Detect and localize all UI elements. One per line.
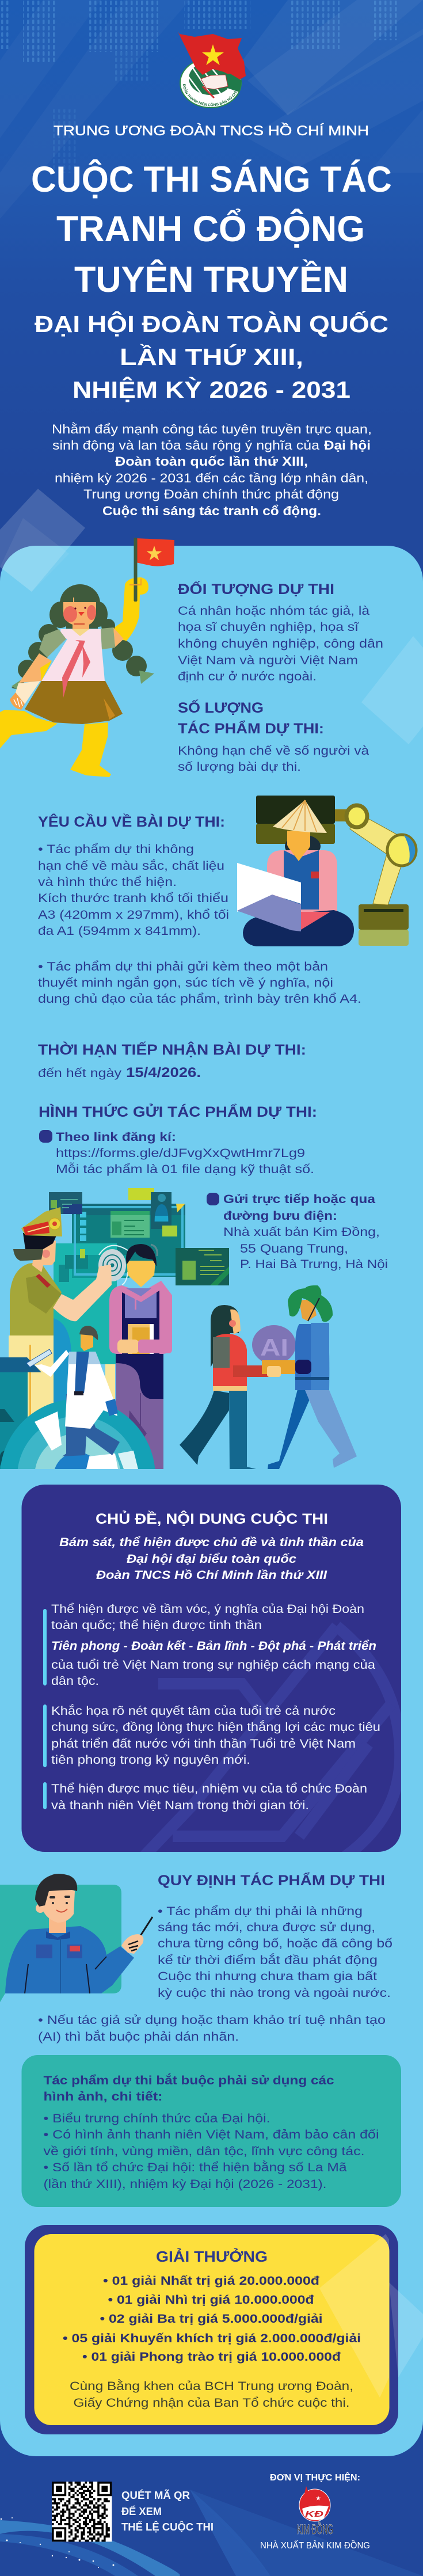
content block 1: toàn quốc; thể hiện được tinh thần: [51, 1619, 262, 1632]
content block 1: Tiên phong - Đoàn kết - Bản lĩnh - Đột phá - Phát triển: [51, 1639, 376, 1653]
section: work regulations: • Tác phẩm dự thi phải là những: [158, 1905, 363, 1918]
flag: [136, 538, 174, 566]
section: contestants: ĐỐI TƯỢNG DỰ THI: [178, 580, 334, 598]
section: work regulations: (AI) thì bắt buộc phải dán nhãn.: [38, 2030, 239, 2044]
fingerprint: [98, 1249, 126, 1281]
intro paragraph: Đại hội: [324, 438, 371, 452]
decorative diamonds: [0, 489, 423, 744]
section: entry requirements: [38, 813, 361, 1006]
theme statement: Bám sát, thể hiện được chủ đề và tinh thần của: [59, 1536, 364, 1549]
prize list: • 01 giải Nhì trị giá 10.000.000đ: [108, 2293, 314, 2307]
braids and hair: [12, 584, 147, 691]
neck scarf: [62, 640, 85, 698]
content block 3: và thanh niên Việt Nam trong thời gian tới.: [51, 1799, 309, 1812]
content block 2: tiên phong trong kỷ nguyên mới.: [51, 1753, 250, 1767]
subtitle: LẦN THỨ XIII,: [120, 344, 303, 370]
section: deadline: [38, 1041, 306, 1080]
section: entry requirements: dung chủ đạo của tác phẩm, trình bày trên khổ A4.: [38, 992, 361, 1006]
section: number of works: TÁC PHẨM DỰ THI:: [178, 720, 324, 737]
woman in red: [180, 1390, 229, 1465]
panel: mandatory imagery: • Biểu trưng chính thức của Đại hội.: [44, 2112, 270, 2125]
prize list: • 05 giải Khuyến khích trị giá 2.000.000đ/giải: [63, 2332, 361, 2345]
section: submission methods: 55 Quang Trung,: [240, 1242, 348, 1255]
illustration: presenter with pointer: [0, 1874, 153, 2002]
section: work regulations: [38, 1872, 392, 2044]
intro paragraph: Trung ương Đoàn chính thức phát động: [83, 487, 339, 501]
intro paragraph: sinh động và lan tỏa sâu rộng ý nghĩa của: [52, 438, 320, 452]
section: submission methods: HÌNH THỨC GỬI TÁC PHẨM DỰ THI:: [39, 1103, 317, 1120]
content block 3: [43, 1782, 367, 1812]
section: submission methods: https://forms.gle/dJFvgXxQwtHmr7Lg9: [56, 1147, 305, 1160]
panel: mandatory imagery: • Có hình ảnh thanh niên Việt Nam, đảm bảo cân đối: [44, 2128, 379, 2141]
content block 2: phát triển đất nước với tinh thần Tuổi trẻ Việt Nam: [51, 1737, 356, 1751]
logo: Kim Dong publisher: [297, 2486, 333, 2537]
prize note: [70, 2380, 353, 2410]
section: number of works: SỐ LƯỢNG: [178, 699, 264, 716]
section: contestants: định cư ở nước ngoài.: [178, 670, 317, 683]
theme statement: [59, 1536, 364, 1582]
prize list: [63, 2274, 361, 2364]
panel: theme and content: [22, 1485, 401, 1856]
prize note: Cùng Bằng khen của BCH Trung ương Đoàn,: [70, 2380, 353, 2393]
subtitle: ĐẠI HỘI ĐOÀN TOÀN QUỐC: [35, 311, 388, 337]
panel: prizes: [25, 2225, 423, 2434]
section: work regulations: sáng tác mới, chưa được sử dụng,: [158, 1921, 375, 1934]
prize list: • 02 giải Ba trị giá 5.000.000đ/giải: [100, 2312, 322, 2326]
section: number of works: Không hạn chế về số người và: [178, 744, 369, 758]
prize list: • 01 giải Nhất trị giá 20.000.000đ: [103, 2274, 319, 2288]
raised arm: [113, 577, 148, 646]
small screens: [49, 1192, 82, 1214]
section: deadline: 15/4/2026.: [126, 1065, 201, 1080]
panel: mandatory imagery: • Số lần tổ chức Đại hội: thể hiện bằng số La Mã: [44, 2161, 347, 2174]
content block 1: [43, 1603, 376, 1688]
theme statement: Đại hội đại biểu toàn quốc: [127, 1553, 296, 1566]
illustration: officer, student and scientist with digital screens: [0, 1188, 229, 1469]
QR caption: [121, 2489, 214, 2533]
section: deadline: đến hết ngày: [38, 1067, 122, 1080]
section: submission methods: Nhà xuất bản Kim Đồng,: [223, 1226, 380, 1239]
shirt: [41, 629, 105, 681]
footer decoration: [0, 2490, 423, 2576]
illustration: people exchanging parcel with AI tag: AI: [260, 1334, 288, 1361]
prize list: • 01 giải Phong trào trị giá 10.000.000đ: [82, 2350, 341, 2364]
section: entry requirements: Kích thước tranh khổ tối thiểu: [38, 892, 228, 905]
section: entry requirements: • Tác phẩm dự thi phải gửi kèm theo một bản: [38, 960, 328, 973]
section: contestants: [178, 580, 383, 683]
publisher credit: [260, 2472, 370, 2551]
intro paragraph: Đoàn toàn quốc lần thứ XIII,: [115, 454, 308, 469]
panel: mandatory imagery: Tác phẩm dự thi bắt buộc phải sử dụng các: [44, 2073, 334, 2087]
officer: [10, 1262, 62, 1335]
section: entry requirements: và hình thức thể hiện.: [38, 876, 177, 889]
panel: mandatory imagery: về giới tính, vùng miền, dân tộc, lĩnh vực công tác.: [44, 2145, 365, 2158]
panel: mandatory imagery: hình ảnh, chi tiết:: [44, 2090, 162, 2103]
section: deadline: THỜI HẠN TIẾP NHẬN BÀI DỰ THI:: [38, 1041, 306, 1058]
QR code: [52, 2482, 112, 2541]
section: submission methods: đường bưu điện:: [223, 1209, 337, 1223]
content block 2: [43, 1704, 380, 1767]
QR caption: ĐỂ XEM: [121, 2505, 162, 2517]
section: entry requirements: • Tác phẩm dự thi không: [38, 843, 194, 856]
woman: [285, 835, 321, 858]
subtitle: [35, 311, 388, 403]
globe: [0, 1400, 155, 1469]
logo: Kim Dong publisher: KIM ĐỒNG: [297, 2521, 333, 2537]
intro paragraph: [52, 422, 372, 518]
skirt: [25, 681, 123, 724]
section: work regulations: kỳ cuộc thi nào trong và ngoài nước.: [158, 1987, 391, 2000]
conical hat: [273, 800, 327, 833]
section: work regulations: kể từ thời điểm bắt đầu phát động: [158, 1954, 378, 1967]
intro paragraph: Cuộc thi sáng tác tranh cổ động.: [102, 504, 321, 518]
parcel: [262, 1360, 295, 1374]
publisher credit: NHÀ XUẤT BẢN KIM ĐỒNG: [260, 2540, 370, 2551]
illustration: people exchanging parcel with AI tag: [180, 1285, 357, 1469]
logo: Youth Union emblem: [178, 32, 246, 108]
title: TUYÊN TRUYỀN: [74, 259, 348, 300]
section: entry requirements: YÊU CẦU VỀ BÀI DỰ THI:: [38, 813, 225, 830]
section: entry requirements: hạn chế về màu sắc, chất liệu: [38, 859, 224, 873]
section: work regulations: chưa từng công bố, hoặc đã công bố: [158, 1937, 392, 1950]
panel: mandatory imagery: [22, 2055, 401, 2207]
robot base: [359, 904, 409, 930]
subtitle: NHIỆM KỲ 2026 - 2031: [73, 376, 350, 403]
content block 1: của tuổi trẻ Việt Nam trong sự nghiệp cách mạng của: [51, 1658, 375, 1672]
teal backdrop: [72, 1215, 185, 1277]
panel: light blue content area: [0, 546, 423, 2456]
content block 1: Thể hiện được về tầm vóc, ý nghĩa của Đại hội Đoàn: [51, 1603, 364, 1616]
logo: Kim Dong publisher: KĐ: [305, 2509, 323, 2519]
section: submission methods: Mỗi tác phẩm là 01 file dạng kỹ thuật số.: [56, 1163, 314, 1176]
title: CUỘC THI SÁNG TÁC: [31, 159, 392, 200]
section: work regulations: QUY ĐỊNH TÁC PHẨM DỰ THI: [158, 1872, 385, 1889]
content block 3: Thể hiện được mục tiêu, nhiệm vụ của tổ chức Đoàn: [51, 1782, 367, 1795]
face: [63, 602, 96, 630]
section: number of works: số lượng bài dự thi.: [178, 760, 301, 774]
intro paragraph: nhiệm kỳ 2026 - 2031 đến các tầng lớp nhân dân,: [55, 471, 368, 485]
title: [31, 159, 392, 300]
heading: CHỦ ĐỀ, NỘI DUNG CUỘC THI: [96, 1510, 328, 1527]
section: submission methods: [39, 1103, 388, 1271]
publisher credit: ĐƠN VỊ THỰC HIỆN:: [270, 2472, 360, 2483]
QR caption: THỂ LỆ CUỘC THI: [121, 2521, 214, 2533]
section: submission methods: P. Hai Bà Trưng, Hà Nội: [240, 1258, 388, 1271]
lower left blocks: [9, 1335, 54, 1423]
illustration: girl with flag: [0, 538, 174, 777]
section: submission methods: Gửi trực tiếp hoặc qua: [223, 1193, 375, 1206]
left leg: [70, 722, 111, 777]
intro paragraph: Nhằm đẩy mạnh công tác tuyên truyền trực quan,: [52, 422, 372, 436]
QR caption: QUÉT MÃ QR: [121, 2489, 190, 2501]
section: contestants: Việt Nam và người Việt Nam: [178, 654, 358, 667]
robot arm: [373, 846, 404, 905]
content block 2: chung sức, đồng lòng thực hiện thắng lợi các mục tiêu: [51, 1721, 380, 1734]
panel: mandatory imagery: (lần thứ XIII), nhiệm kỳ Đại hội (2026 - 2031).: [44, 2178, 327, 2191]
man in blue: [268, 1387, 314, 1469]
section: work regulations: • Nếu tác giả sử dụng hoặc tham khảo trí tuệ nhân tạo: [38, 2014, 386, 2027]
organisation name: TRUNG ƯƠNG ĐOÀN TNCS HỒ CHÍ MINH: [54, 123, 369, 139]
theme statement: Đoàn TNCS Hồ Chí Minh lần thứ XIII: [96, 1569, 327, 1582]
section: entry requirements: đa A1 (594mm x 841mm).: [38, 924, 201, 938]
scientist: [62, 1394, 120, 1456]
section: contestants: Cá nhân hoặc nhóm tác giả, là: [178, 604, 369, 618]
section: entry requirements: thuyết minh ngắn gọn, súc tích về ý nghĩa, nội: [38, 976, 333, 990]
section: contestants: họa sĩ chuyên nghiệp, họa sĩ: [178, 621, 359, 634]
section: entry requirements: A3 (420mm x 297mm), khổ tối: [38, 908, 229, 922]
section: work regulations: Cuộc thi nhưng chưa tham gia bất: [158, 1970, 377, 1983]
illustration: woman in conical hat with robot arm: [237, 796, 416, 946]
prize note: Giấy Chứng nhận của Ban Tổ chức cuộc thi.: [74, 2396, 350, 2410]
pointing arm: [53, 1265, 112, 1321]
content block 2: Khắc họa rõ nét quyết tâm của tuổi trẻ cả nước: [51, 1704, 336, 1718]
section: submission methods: Theo link đăng kí:: [56, 1131, 176, 1144]
student: [127, 1261, 155, 1287]
title: TRANH CỔ ĐỘNG: [56, 208, 365, 249]
prizes heading: GIẢI THƯỞNG: [156, 2247, 268, 2265]
content block 1: dân tộc.: [51, 1675, 99, 1688]
section: number of works: [178, 699, 369, 774]
section: contestants: không chuyên nghiệp, công dân: [178, 637, 383, 650]
